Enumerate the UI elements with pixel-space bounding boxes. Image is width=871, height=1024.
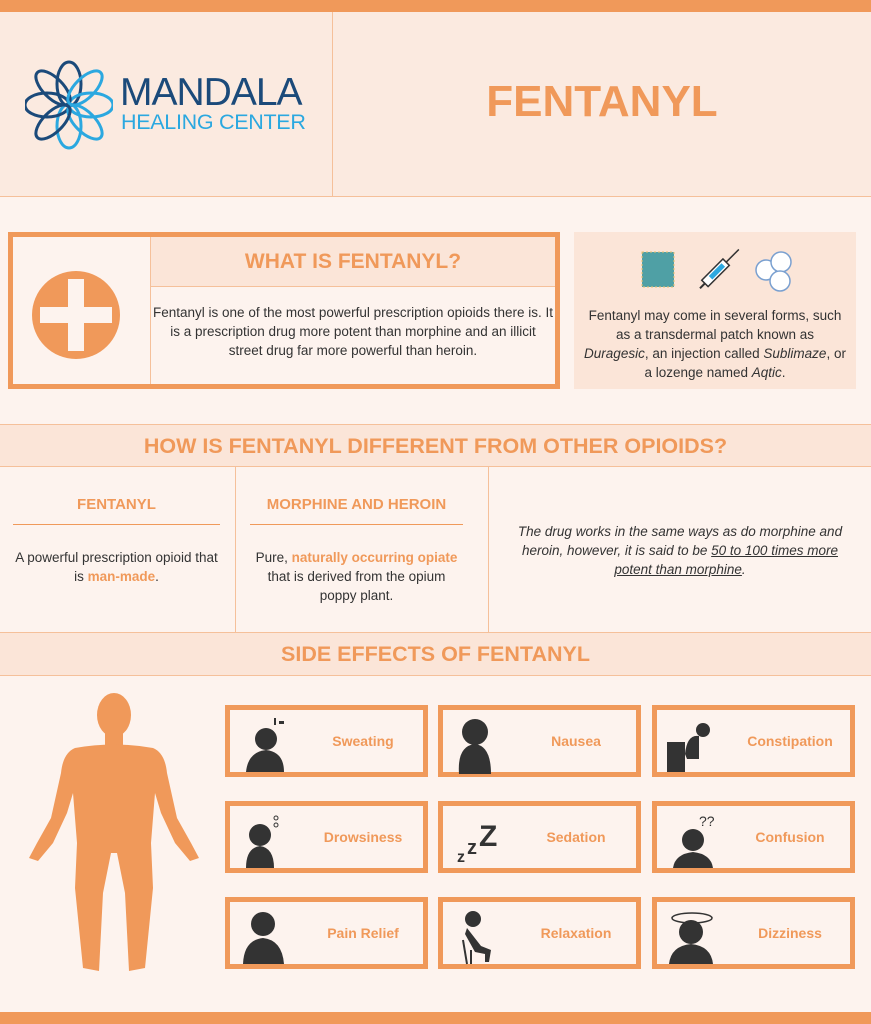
top bar xyxy=(0,0,871,12)
heading: WHAT IS FENTANYL? xyxy=(245,250,461,273)
text: Fentanyl is one of the most powerful prescription opioids there is. It is a prescription drug more potent than morphine and an illicit street drug far more powerful than heroin. xyxy=(153,305,553,358)
heading xyxy=(151,237,555,287)
symptom: pain relief xyxy=(225,897,428,969)
symptom: sedation: Sedation xyxy=(546,829,606,845)
column: morphine: MORPHINE AND HEROIN xyxy=(267,496,446,513)
symptom: pain relief: Pain Relief xyxy=(327,925,399,941)
icons: patch syringe pills xyxy=(642,248,792,292)
logo xyxy=(25,60,306,150)
column: fentanyl xyxy=(13,496,220,584)
logo text: MANDALA xyxy=(120,71,302,114)
panel: forms xyxy=(574,232,856,389)
symptom: drowsiness: Drowsiness xyxy=(324,829,402,845)
column: fentanyl: FENTANYL xyxy=(77,496,156,513)
icon: mandala xyxy=(25,60,113,150)
text: Fentanyl may come in several forms, such as a transdermal patch known as Duragesic, an injection called Sublimaze, or a lozenge named Aqtic. xyxy=(584,308,846,380)
symptom: dizziness xyxy=(652,897,855,969)
column: morphine xyxy=(250,496,463,603)
symptom: sedation: Z xyxy=(479,820,497,853)
symptom: nausea xyxy=(438,705,641,777)
symptom: relaxation xyxy=(438,897,641,969)
bottom bar xyxy=(0,1012,871,1024)
section heading: side effects: SIDE EFFECTS OF FENTANYL xyxy=(281,642,590,666)
symptom: sedation xyxy=(438,801,641,873)
header panel xyxy=(0,12,871,197)
column: fentanyl: A powerful prescription opioid that is man-made. xyxy=(15,550,218,584)
body figure xyxy=(29,693,199,971)
symptom: sweating xyxy=(225,705,428,777)
symptom: constipation: Constipation xyxy=(747,733,833,749)
symptom: constipation xyxy=(652,705,855,777)
symptom: sweating: Sweating xyxy=(332,733,394,749)
symptom: sedation: z xyxy=(467,837,477,859)
symptom: confusion xyxy=(652,801,855,873)
panel: what is fentanyl xyxy=(8,232,560,389)
symptom: drowsiness xyxy=(225,801,428,873)
logo: HEALING CENTER xyxy=(121,110,306,134)
symptom: confusion: ?? xyxy=(699,813,715,829)
symptom: dizziness: Dizziness xyxy=(758,925,822,941)
section heading: how different: HOW IS FENTANYL DIFFERENT FROM OTHER OPIOIDS? xyxy=(144,434,727,458)
symptom: sedation: z xyxy=(457,849,465,866)
section heading: how different xyxy=(0,424,871,467)
title: FENTANYL xyxy=(486,77,718,126)
column: morphine: Pure, naturally occurring opiate that is derived from the opium poppy plant. xyxy=(256,550,457,603)
section heading: side effects xyxy=(0,633,871,676)
symptom: confusion: Confusion xyxy=(755,829,825,845)
symptom: nausea: Nausea xyxy=(551,733,601,749)
comparison note: The drug works in the same ways as do morphine and heroin, however, it is said to be 50 to 100 times more potent than morphine. xyxy=(518,524,842,577)
symptom: relaxation: Relaxation xyxy=(541,925,611,941)
icon: medical cross xyxy=(32,271,120,359)
